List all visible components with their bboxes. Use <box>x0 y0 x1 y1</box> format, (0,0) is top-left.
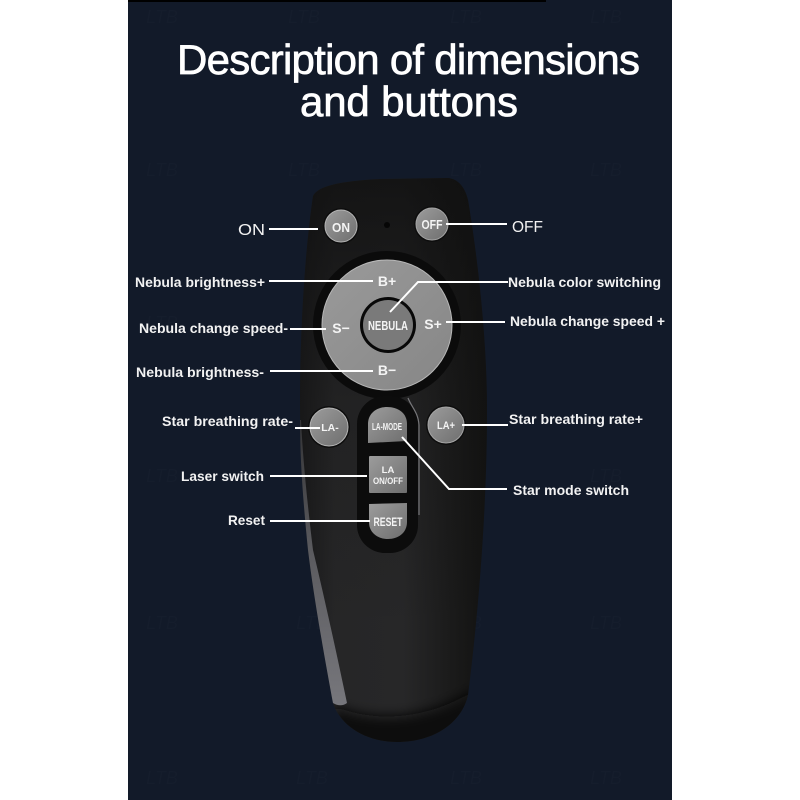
callout: Star breathing rate+: Star breathing rate+ <box>509 411 643 427</box>
watermarks: LTB <box>146 7 178 27</box>
RESET button: RESET <box>374 517 402 529</box>
LA+ button <box>426 405 466 445</box>
S+ key: S+ <box>424 316 442 332</box>
ON button <box>323 208 359 244</box>
callout: Nebula change speed +: Nebula change speed + <box>510 313 665 329</box>
callout: Nebula brightness+: Nebula brightness+ <box>135 274 265 290</box>
S- key: S− <box>332 320 350 336</box>
callout: Nebula color switching <box>390 274 661 312</box>
callout: Nebula color switching: Nebula color switching <box>508 274 661 290</box>
remote body <box>295 175 492 760</box>
callout: Nebula brightness-: Nebula brightness- <box>136 364 264 380</box>
infrared dot <box>384 222 390 228</box>
remote left edge highlight <box>300 420 347 705</box>
OFF button <box>414 206 450 242</box>
center button capsule <box>357 396 418 553</box>
watermarks: LTB <box>590 7 622 27</box>
callout: ON: ON <box>238 222 265 239</box>
watermarks: LTB <box>296 768 328 788</box>
LA ON/OFF button: ON/OFF <box>373 476 403 487</box>
OFF button: OFF <box>422 217 443 232</box>
LA-MODE button <box>368 407 407 443</box>
callout: Star mode switch <box>402 437 629 498</box>
NEBULA button <box>360 297 416 353</box>
watermarks: LTB <box>146 313 178 333</box>
watermarks: LTB <box>146 613 178 633</box>
LA ON/OFF button <box>369 456 407 493</box>
LA- button <box>308 406 350 448</box>
background panel <box>128 0 672 800</box>
LA+ button: LA+ <box>437 420 455 432</box>
watermarks: LTB <box>590 768 622 788</box>
LA ON/OFF button: LA <box>382 465 394 476</box>
title <box>177 36 640 125</box>
title: Description of dimensions <box>177 36 640 83</box>
watermarks: LTB <box>590 466 622 486</box>
RESET button <box>369 503 407 539</box>
watermarks: LTB <box>590 613 622 633</box>
callout: Laser switch: Laser switch <box>181 468 264 484</box>
ON button: ON <box>332 220 350 235</box>
watermarks: LTB <box>146 768 178 788</box>
remote bottom shade <box>334 693 468 742</box>
watermarks: LTB <box>296 613 328 633</box>
remote control <box>295 175 492 760</box>
callout: OFF <box>446 219 543 236</box>
watermarks: LTB <box>450 160 482 180</box>
watermarks <box>146 7 622 788</box>
watermarks: LTB <box>450 7 482 27</box>
watermarks: LTB <box>590 160 622 180</box>
watermarks: LTB <box>146 160 178 180</box>
watermarks: LTB <box>450 768 482 788</box>
nebula disc <box>313 251 461 399</box>
title: and buttons <box>300 78 518 125</box>
B+ key: B+ <box>378 273 396 289</box>
watermarks: LTB <box>288 7 320 27</box>
NEBULA button: NEBULA <box>368 318 408 333</box>
LA- button: LA- <box>321 422 339 434</box>
LA-MODE button: LA-MODE <box>372 422 402 433</box>
watermarks: LTB <box>450 613 482 633</box>
callout: Reset: Reset <box>228 512 265 528</box>
watermarks: LTB <box>590 313 622 333</box>
callout: Star breathing rate-: Star breathing rate- <box>162 413 293 429</box>
callout: ON <box>238 222 318 239</box>
watermarks: LTB <box>288 160 320 180</box>
watermarks: LTB <box>146 466 178 486</box>
B- key: B− <box>378 362 396 378</box>
callout: OFF: OFF <box>512 219 543 236</box>
callout: Star mode switch: Star mode switch <box>513 482 629 498</box>
callout: Nebula change speed-: Nebula change speed- <box>139 320 288 336</box>
